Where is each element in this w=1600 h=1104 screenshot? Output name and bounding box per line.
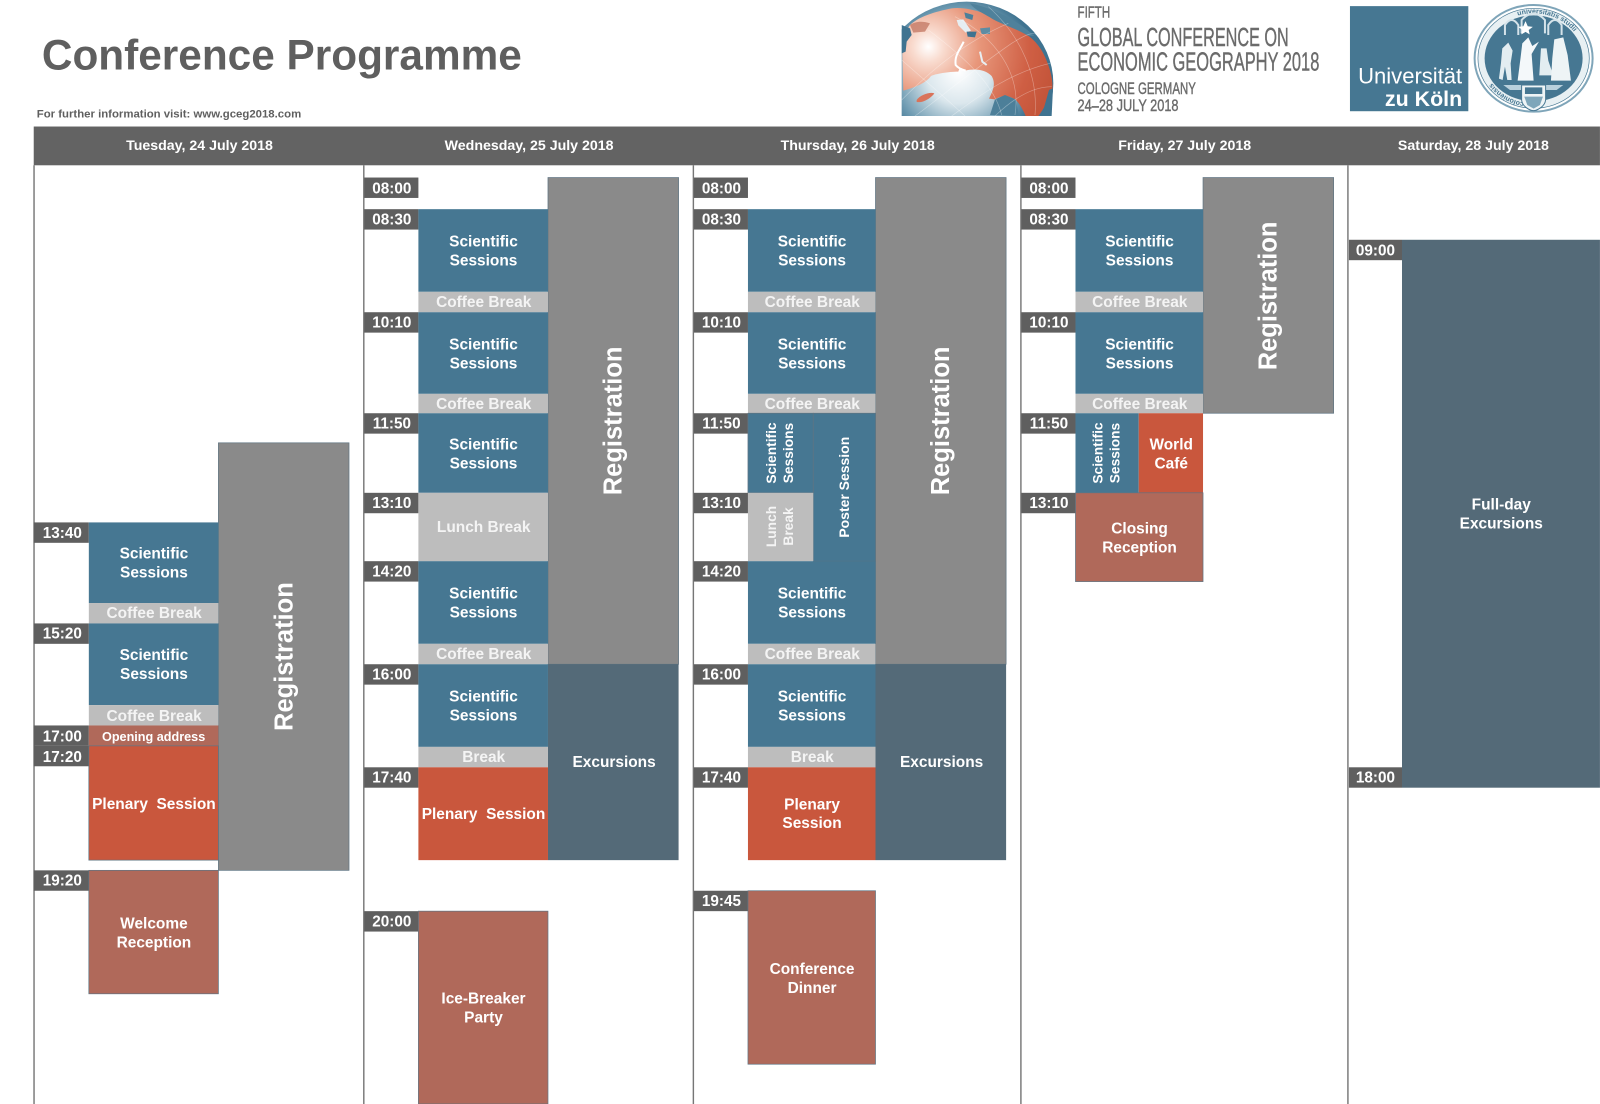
- scientific sessions: Scientific: [449, 436, 518, 453]
- panel: Friday schedule: [1021, 178, 1334, 582]
- time 17:00: [34, 725, 89, 746]
- time 16:00: 16:00: [702, 667, 741, 684]
- scientific sessions: Scientific: [778, 233, 847, 250]
- scientific sessions: [748, 664, 876, 747]
- time 17:20: 17:20: [43, 749, 82, 766]
- time 11:50: [694, 413, 748, 434]
- university logo: Universität: [1358, 64, 1463, 89]
- university logo: zu Köln: [1385, 87, 1462, 111]
- scientific sessions: Sessions: [450, 355, 517, 372]
- excursions: Excursions: [572, 754, 656, 771]
- time 19:20: 19:20: [43, 873, 82, 890]
- full-day excursions: [1402, 240, 1600, 788]
- scientific sessions: Scientific: [120, 647, 189, 664]
- scientific sessions: [418, 664, 548, 747]
- scientific sessions: Sessions: [120, 666, 188, 683]
- plenary session: [748, 767, 876, 860]
- time 08:30: [364, 209, 418, 230]
- time 19:20: [34, 870, 89, 891]
- time 08:00: 08:00: [372, 180, 411, 197]
- time 13:10: 13:10: [1029, 495, 1069, 512]
- time 10:10: [694, 312, 748, 333]
- panel: Tuesday schedule: [34, 443, 349, 994]
- time 08:30: 08:30: [372, 211, 411, 228]
- scientific sessions, vertical: Scientific: [764, 422, 779, 484]
- lunch break, vertical: [748, 493, 813, 561]
- welcome reception: [89, 870, 218, 994]
- plenary session: Session: [782, 815, 842, 832]
- header bar with day names: Saturday, 28 July 2018: [1398, 138, 1549, 154]
- scientific sessions, vertical: [748, 413, 813, 493]
- break: [748, 747, 876, 767]
- time 16:00: [694, 664, 748, 685]
- coffee break: Coffee Break: [436, 646, 532, 663]
- closing reception: [1075, 493, 1203, 582]
- scientific sessions, vertical: Scientific: [1091, 422, 1106, 484]
- time 17:20: [34, 746, 89, 766]
- coffee break: [748, 292, 876, 312]
- coffee break: [418, 394, 548, 413]
- scientific sessions: Sessions: [778, 252, 846, 269]
- conference dinner: Conference: [770, 961, 855, 978]
- lunch break, vertical: Break: [781, 507, 796, 546]
- time 14:20: [694, 561, 748, 582]
- time 09:00: [1349, 240, 1402, 260]
- scientific sessions: [89, 522, 218, 603]
- opening address: Opening address: [102, 730, 205, 744]
- time 10:10: 10:10: [702, 315, 741, 332]
- scientific sessions: [89, 623, 218, 705]
- ice-breaker party: Party: [464, 1009, 503, 1026]
- coffee break: [418, 292, 548, 312]
- time 16:00: 16:00: [372, 667, 411, 684]
- time 20:00: [364, 911, 418, 932]
- time 17:40: [694, 767, 748, 788]
- header bar with day names: Friday, 27 July 2018: [1118, 138, 1251, 154]
- scientific sessions: [418, 561, 548, 644]
- scientific sessions: Scientific: [778, 585, 847, 602]
- scientific sessions: [418, 413, 548, 493]
- time 13:10: [694, 493, 748, 513]
- scientific sessions: [418, 209, 548, 292]
- coffee break: [418, 644, 548, 664]
- time 17:40: 17:40: [372, 770, 411, 787]
- time 08:00: [1021, 178, 1075, 198]
- scientific sessions: [1075, 209, 1203, 292]
- icon: university seal: [1474, 4, 1594, 113]
- world cafe: World: [1149, 436, 1193, 453]
- scientific sessions: Scientific: [1105, 336, 1174, 353]
- coffee break: [748, 644, 876, 664]
- panel: Wednesday schedule: [364, 178, 679, 1104]
- scientific sessions: Sessions: [1106, 252, 1173, 269]
- full-day excursions: Excursions: [1460, 516, 1543, 533]
- time 19:45: 19:45: [702, 893, 741, 910]
- conference name: COLOGNE GERMANY: [1078, 79, 1196, 98]
- plenary session: Plenary: [784, 797, 840, 814]
- icon: university seal: universitatis studii: [1517, 9, 1578, 32]
- time 17:00: 17:00: [43, 728, 82, 745]
- conference name: GLOBAL CONFERENCE ON: [1078, 24, 1289, 52]
- scientific sessions, vertical: Sessions: [781, 422, 796, 483]
- coffee break: [1075, 394, 1203, 413]
- time 16:00: [364, 664, 418, 685]
- time 13:10: [1021, 493, 1075, 513]
- full-day excursions: Full-day: [1472, 497, 1531, 514]
- registration block: Registration: [599, 346, 627, 495]
- conference name: FIFTH: [1078, 4, 1110, 21]
- break: [418, 747, 548, 767]
- scientific sessions: Sessions: [1106, 355, 1173, 372]
- scientific sessions: [418, 312, 548, 394]
- scientific sessions: [748, 312, 876, 394]
- coffee break: [89, 705, 218, 725]
- time 09:00: 09:00: [1356, 243, 1395, 260]
- excursions: [548, 664, 679, 860]
- lunch break: [418, 493, 548, 561]
- welcome reception: Reception: [117, 934, 191, 951]
- coffee break: Coffee Break: [765, 646, 860, 663]
- excursions: Excursions: [900, 754, 983, 771]
- scientific sessions: Sessions: [120, 565, 188, 582]
- lunch break: Lunch Break: [437, 519, 531, 536]
- header bar with day names: Thursday, 26 July 2018: [781, 138, 935, 154]
- time 17:40: [364, 767, 418, 788]
- world cafe: [1139, 413, 1203, 493]
- coffee break: [89, 603, 218, 623]
- scientific sessions: Scientific: [778, 336, 847, 353]
- title: Conference Programme: [42, 31, 522, 78]
- scientific sessions: Scientific: [449, 336, 518, 353]
- time 13:40: 13:40: [43, 525, 82, 542]
- coffee break: Coffee Break: [436, 396, 532, 413]
- panel: Saturday schedule: [1349, 240, 1600, 788]
- scientific sessions: Sessions: [450, 707, 517, 724]
- scientific sessions: Sessions: [778, 707, 846, 724]
- conference name: ECONOMIC GEOGRAPHY 2018: [1078, 48, 1319, 76]
- scientific sessions, vertical: Sessions: [1107, 422, 1122, 483]
- scientific sessions: Scientific: [1105, 233, 1174, 250]
- coffee break: Coffee Break: [436, 294, 532, 311]
- time 11:50: 11:50: [1030, 416, 1068, 433]
- lunch break, vertical: Lunch: [764, 506, 779, 547]
- panel: Thursday schedule: [694, 178, 1006, 1064]
- registration block: Registration: [1254, 222, 1282, 370]
- coffee break: Coffee Break: [765, 396, 860, 413]
- poster session: [813, 413, 876, 561]
- time 08:00: 08:00: [1029, 180, 1069, 197]
- world cafe: Café: [1154, 455, 1188, 472]
- time 13:10: 13:10: [702, 495, 741, 512]
- conference name: 24–28 JULY 2018: [1078, 96, 1179, 115]
- header bar with day names: Tuesday, 24 July 2018: [126, 138, 273, 154]
- scientific sessions: [748, 209, 876, 292]
- ice-breaker party: [418, 911, 548, 1104]
- scientific sessions: Sessions: [778, 604, 846, 621]
- header bar with day names: Wednesday, 25 July 2018: [445, 138, 614, 154]
- registration block: [548, 178, 679, 664]
- time 13:10: 13:10: [372, 495, 411, 512]
- plenary session: Plenary Session: [422, 806, 545, 823]
- time 15:20: 15:20: [43, 626, 82, 643]
- time 14:20: 14:20: [702, 563, 741, 580]
- coffee break: Coffee Break: [107, 708, 202, 725]
- scientific sessions: Sessions: [450, 252, 517, 269]
- registration block: [218, 443, 349, 870]
- time 11:50: [364, 413, 418, 434]
- plenary session: [418, 767, 548, 860]
- coffee break: Coffee Break: [1092, 396, 1188, 413]
- coffee break: [1075, 292, 1203, 312]
- closing reception: Closing: [1111, 521, 1168, 538]
- time 10:10: [364, 312, 418, 333]
- excursions: [876, 664, 1006, 860]
- scientific sessions: Scientific: [778, 688, 847, 705]
- scientific sessions: [1075, 312, 1203, 394]
- poster session: Poster Session: [836, 437, 852, 538]
- time 18:00: [1349, 767, 1402, 788]
- scientific sessions: [748, 561, 876, 644]
- time 11:50: 11:50: [702, 416, 741, 433]
- plenary session: Plenary Session: [92, 796, 216, 813]
- conference dinner: [748, 891, 876, 1064]
- time 13:10: [364, 493, 418, 513]
- coffee break: [748, 394, 876, 413]
- conference name: [1078, 4, 1319, 115]
- conference dinner: Dinner: [788, 980, 836, 997]
- registration block: [1203, 178, 1334, 413]
- time 08:30: 08:30: [1029, 211, 1069, 228]
- icon: globe logo: [902, 2, 1054, 116]
- scientific sessions: Sessions: [778, 355, 846, 372]
- scientific sessions: Scientific: [449, 233, 518, 250]
- time 10:10: 10:10: [372, 315, 411, 332]
- time 19:45: [694, 891, 748, 911]
- time 11:50: [1021, 413, 1075, 434]
- closing reception: Reception: [1102, 540, 1177, 557]
- scientific sessions: Sessions: [450, 604, 517, 621]
- scientific sessions: Scientific: [449, 585, 518, 602]
- time 10:10: [1021, 312, 1075, 333]
- time 08:30: 08:30: [702, 211, 741, 228]
- time 08:30: [694, 209, 748, 230]
- scientific sessions, vertical: [1075, 413, 1139, 493]
- scientific sessions: Scientific: [449, 688, 518, 705]
- time 08:00: 08:00: [702, 180, 741, 197]
- welcome reception: Welcome: [120, 916, 188, 933]
- scientific sessions: Scientific: [120, 546, 189, 563]
- time 08:00: [694, 178, 748, 198]
- coffee break: Coffee Break: [107, 605, 202, 622]
- time 13:40: [34, 522, 89, 543]
- time 17:40: 17:40: [702, 770, 741, 787]
- ice-breaker party: Ice-Breaker: [441, 990, 526, 1007]
- plenary session: [89, 746, 218, 860]
- time 15:20: [34, 623, 89, 644]
- time 11:50: 11:50: [373, 416, 411, 433]
- university logo: [1350, 6, 1468, 111]
- time 20:00: 20:00: [372, 913, 411, 930]
- coffee break: Coffee Break: [1092, 294, 1188, 311]
- break: Break: [462, 749, 506, 766]
- opening address: [89, 725, 218, 746]
- time 14:20: [364, 561, 418, 582]
- registration block: [876, 178, 1006, 664]
- header bar with day names: [34, 127, 1600, 165]
- website note: For further information visit: www.gceg2018.com: [37, 108, 301, 120]
- scientific sessions: Sessions: [450, 455, 517, 472]
- break: Break: [791, 749, 834, 766]
- registration block: Registration: [927, 346, 955, 495]
- time 10:10: 10:10: [1029, 315, 1069, 332]
- time 08:30: [1021, 209, 1075, 230]
- time 14:20: 14:20: [372, 563, 411, 580]
- coffee break: Coffee Break: [765, 294, 860, 311]
- registration block: Registration: [270, 582, 298, 731]
- time 08:00: [364, 178, 418, 198]
- time 18:00: 18:00: [1356, 770, 1395, 787]
